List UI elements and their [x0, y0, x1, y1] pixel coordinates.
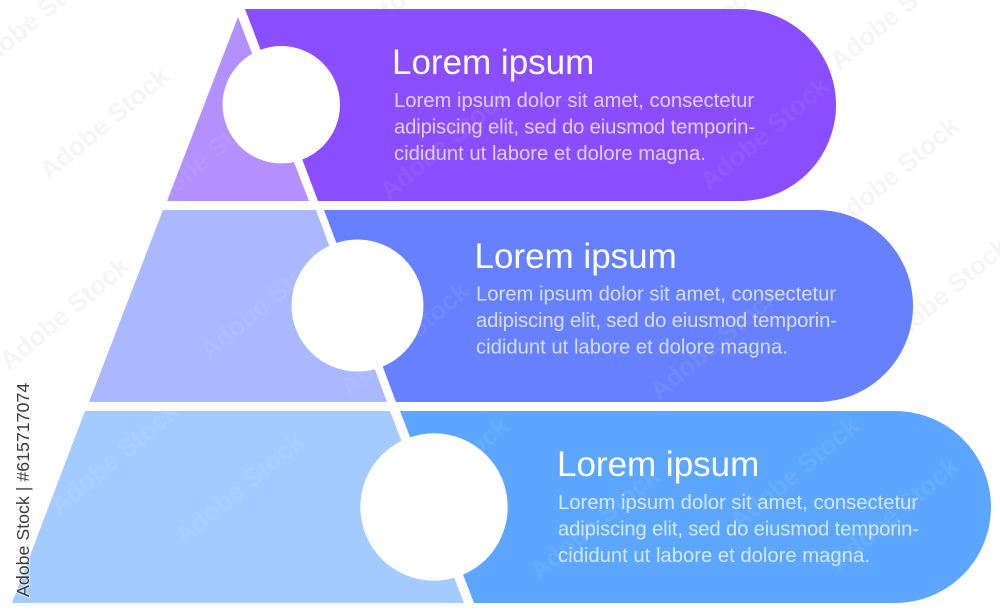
watermark overlay: Adobe Stock	[374, 80, 515, 206]
watermark overlay: Adobe Stock	[644, 280, 785, 406]
dark rounded panel	[400, 411, 991, 603]
heading: Lorem ipsum	[392, 43, 594, 82]
watermark overlay: Adobe Stock	[169, 425, 310, 551]
body text: Lorem ipsum dolor sit amet, consectetur	[394, 90, 754, 112]
row 1: top tier	[167, 9, 836, 201]
watermark overlay: Adobe Stock	[824, 450, 965, 576]
white circle	[223, 46, 340, 163]
watermark on background: Adobe Stock	[824, 110, 965, 236]
watermark on background	[0, 0, 1000, 376]
body text: adipiscing elit, sed do eiusmod temporin-	[558, 518, 919, 540]
row 3: bottom tier	[12, 411, 991, 603]
body text: adipiscing elit, sed do eiusmod temporin-	[394, 116, 755, 138]
heading: Lorem ipsum	[557, 445, 759, 484]
dark rounded panel	[324, 210, 913, 402]
white circle	[360, 433, 508, 581]
row 2: middle tier	[89, 210, 913, 402]
watermark overlay: Adobe Stock	[694, 70, 835, 196]
body text: cididunt ut labore et dolore magna.	[558, 545, 870, 567]
body text: Lorem ipsum dolor sit amet, consectetur	[558, 492, 918, 514]
watermark overlay: Adobe Stock	[334, 275, 475, 401]
watermark overlay: Adobe Stock	[44, 395, 185, 521]
light trapezoid segment	[89, 210, 387, 402]
watermark overlay	[44, 70, 965, 586]
light triangle segment	[167, 17, 309, 201]
watermark overlay: Adobe Stock	[374, 410, 515, 536]
body text: adipiscing elit, sed do eiusmod temporin-	[476, 310, 837, 332]
body text: cididunt ut labore et dolore magna.	[394, 143, 706, 165]
white circle	[292, 240, 424, 372]
watermark overlay: Adobe Stock	[524, 460, 665, 586]
dark rounded panel	[245, 9, 836, 201]
vertical stock credit: Adobe Stock | #615717074	[13, 383, 33, 597]
watermark on background: Adobe Stock	[34, 60, 175, 186]
body text	[476, 284, 837, 358]
body text	[394, 90, 755, 165]
heading: Lorem ipsum	[474, 237, 677, 276]
body text: Lorem ipsum dolor sit amet, consectetur	[476, 284, 836, 306]
watermark overlay: Adobe Stock	[194, 240, 335, 366]
light trapezoid segment	[12, 411, 464, 603]
watermark overlay: Adobe Stock	[724, 410, 865, 536]
body text: cididunt ut labore et dolore magna.	[476, 336, 788, 358]
watermark overlay: Adobe Stock	[134, 95, 275, 221]
body text	[558, 492, 919, 567]
